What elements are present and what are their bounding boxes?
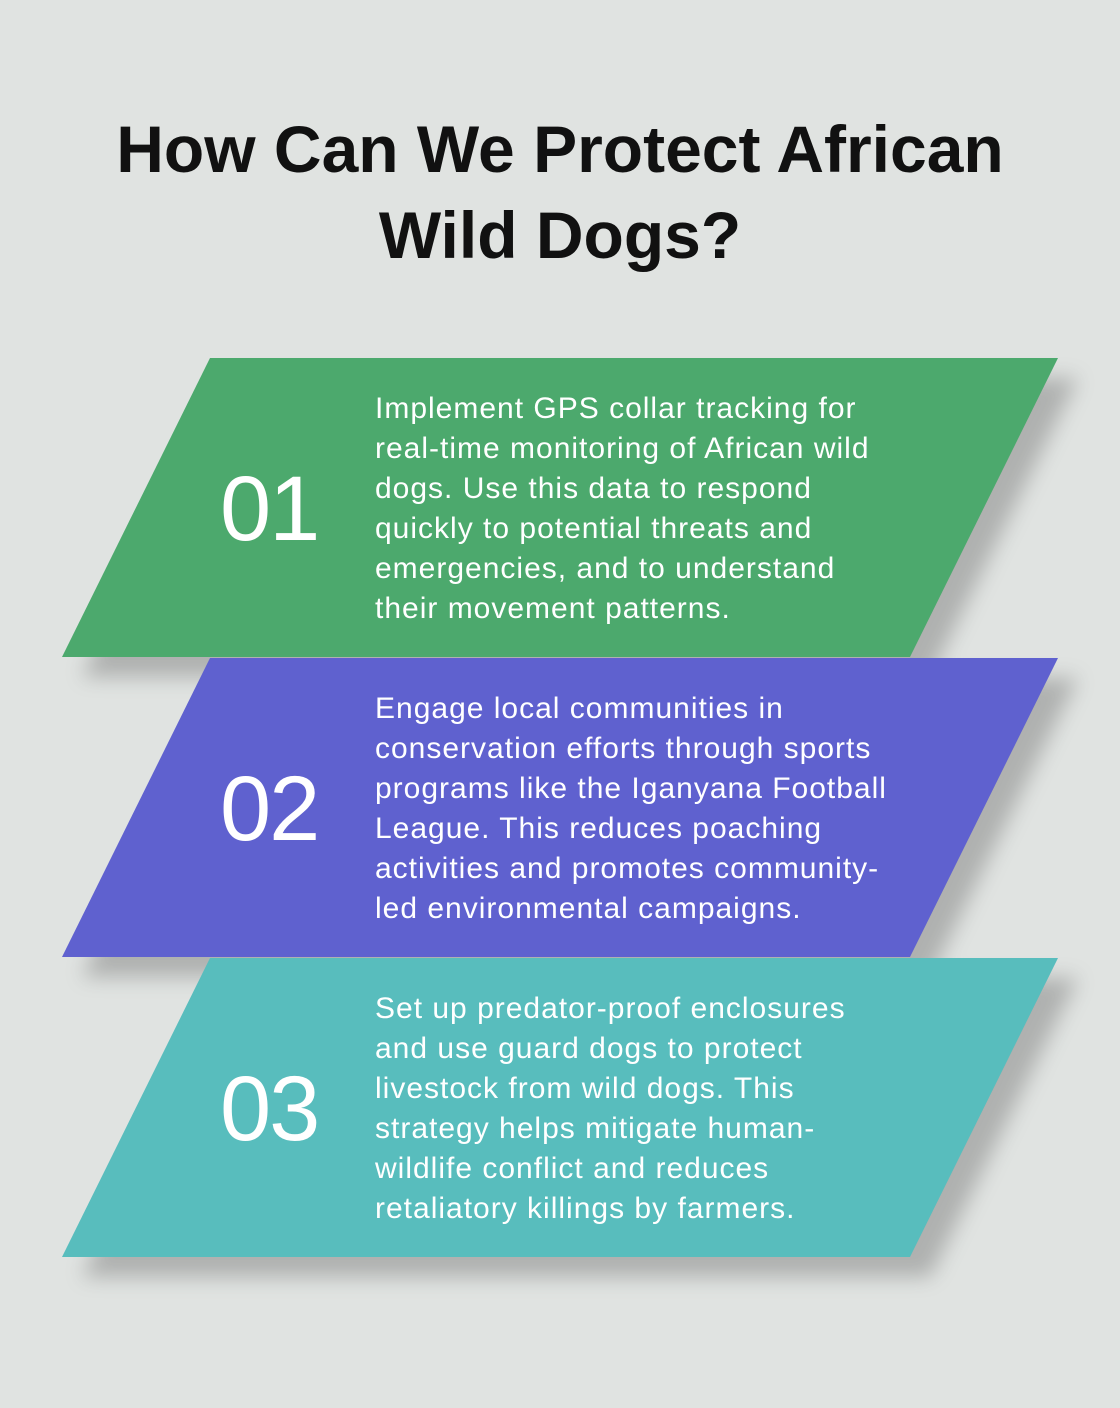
step 1 number: 01 (220, 458, 318, 560)
step 2 number: 02 (220, 758, 318, 860)
title (116, 112, 1004, 272)
step 2 text (375, 692, 887, 925)
step 1 text: quickly to potential threats and (375, 512, 812, 545)
title: Wild Dogs? (379, 198, 741, 272)
step 1 text (375, 392, 870, 625)
step 1 text: emergencies, and to understand (375, 552, 835, 585)
step 2 text: League. This reduces poaching (375, 812, 822, 845)
step 3 text (375, 992, 846, 1225)
step 3 text: livestock from wild dogs. This (375, 1072, 795, 1105)
step 1 text: real-time monitoring of African wild (375, 432, 870, 465)
step 3 text: wildlife conflict and reduces (375, 1152, 769, 1185)
step 2 text: led environmental campaigns. (375, 892, 802, 925)
panel 2 shape (62, 658, 1058, 957)
step 3 text: strategy helps mitigate human- (375, 1112, 815, 1145)
title: How Can We Protect African (116, 112, 1004, 186)
step 2 text: programs like the Iganyana Football (375, 772, 887, 805)
step 1 text: dogs. Use this data to respond (375, 472, 812, 505)
step 1 text: their movement patterns. (375, 592, 731, 625)
panel 1 shape (62, 358, 1058, 657)
step 2 text: Engage local communities in (375, 692, 784, 725)
step 3 text: retaliatory killings by farmers. (375, 1192, 795, 1225)
step 3 text: and use guard dogs to protect (375, 1032, 803, 1065)
step 2 text: activities and promotes community- (375, 852, 879, 885)
step 3 text: Set up predator-proof enclosures (375, 992, 846, 1025)
shadows (82, 378, 1078, 1277)
step 3 number: 03 (220, 1058, 318, 1160)
step 2 text: conservation efforts through sports (375, 732, 871, 765)
step 1 text: Implement GPS collar tracking for (375, 392, 856, 425)
panel 3 shape (62, 958, 1058, 1257)
